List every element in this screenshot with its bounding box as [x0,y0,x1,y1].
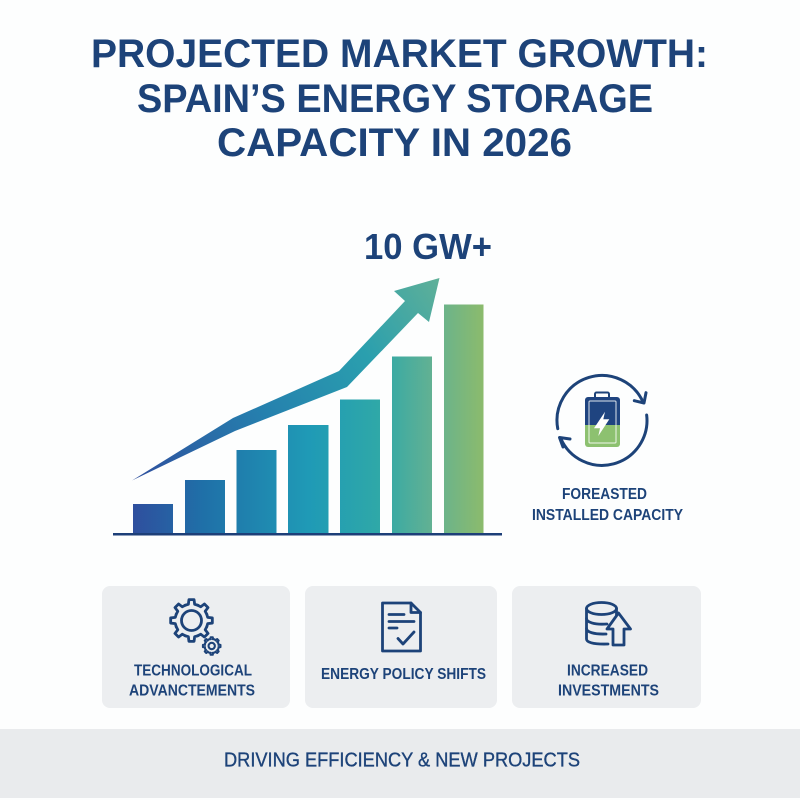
title [91,32,708,165]
bars [133,304,484,533]
panel: technological advancements [102,586,290,708]
footer text: DRIVING EFFICIENCY & NEW PROJECTS [224,750,580,772]
axis line [113,533,502,536]
icon: policy document [382,603,420,651]
title: SPAIN’S ENERGY STORAGE [137,77,653,121]
callout text: INSTALLED CAPACITY [532,507,683,524]
forecasted capacity callout [532,375,683,524]
label [558,662,659,700]
label: ADVANCTEMENTS [129,682,255,700]
label: INVESTMENTS [558,682,659,700]
value label: 10 GW+: 10 GW+ [364,226,492,267]
bar chart with growth arrow [113,226,502,536]
label: INCREASED [567,662,648,680]
icon: coin stack with up arrow [586,602,630,645]
callout text [532,486,683,524]
label [129,662,255,700]
callout text: FOREASTED [562,486,647,503]
growth arrow [132,278,440,480]
panel: energy policy shifts [305,586,497,708]
footer banner [0,729,800,798]
label: ENERGY POLICY SHIFTS [321,666,486,683]
label: TECHNOLOGICAL [134,662,252,680]
panel: increased investments [512,586,701,708]
title: PROJECTED MARKET GROWTH: [91,32,708,76]
icon: battery with cycle arrows [557,375,647,465]
icon: gears [171,600,220,655]
title: CAPACITY IN 2026 [217,121,572,165]
